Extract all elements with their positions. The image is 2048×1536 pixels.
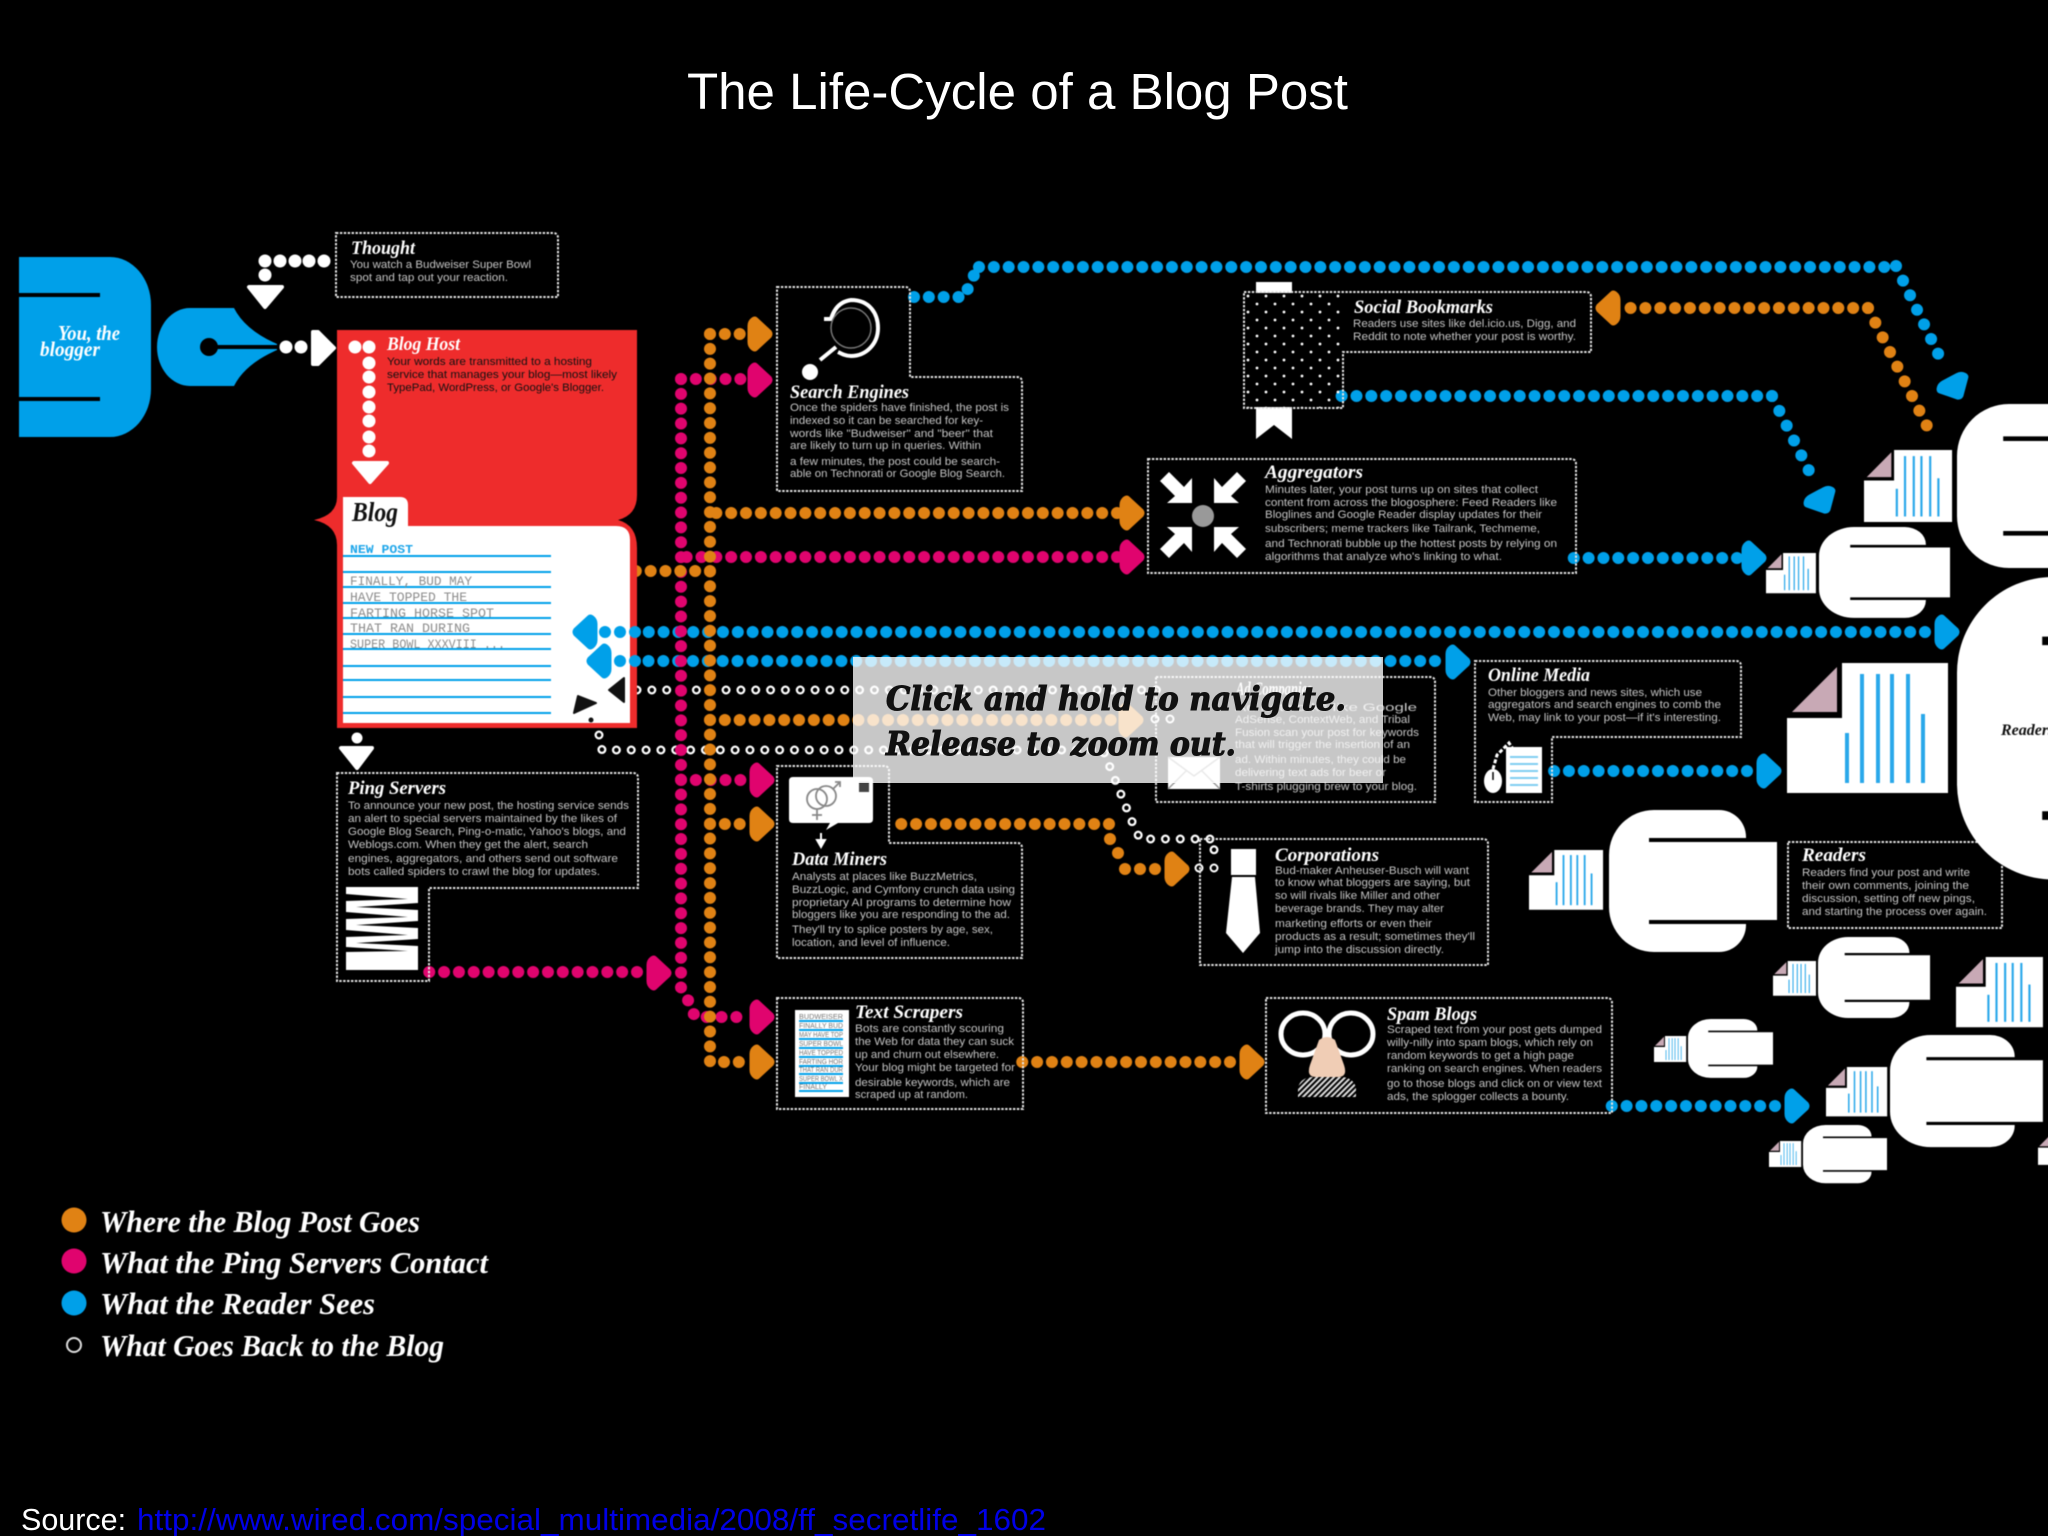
panel: ad companies: delivering text ads for beer or [1235, 767, 1386, 779]
panel: data miners: BuzzLogic, and Cymfony crunch data using [792, 884, 1015, 896]
panel: online media: Online Media [1488, 665, 1590, 686]
panel: ping servers: Ping Servers [347, 778, 446, 799]
panel: ad companies: AdSense, ContextWeb, and Tribal [1235, 714, 1410, 726]
panel: text scrapers: Text Scrapers [855, 1002, 963, 1023]
panel: corporations: Corporations [1275, 845, 1379, 866]
connector: what goes back to the blog (open dots) [599, 690, 1218, 872]
panel: data miners: bloggers like you are responding to the ad. [792, 909, 1010, 921]
legend: What the Ping Servers Contact [100, 1245, 489, 1280]
panel: data miners: proprietary AI programs to determine how [792, 897, 1011, 909]
panel: data miners: location, and level of influence. [792, 937, 950, 949]
panel: corporations [1200, 839, 1488, 965]
blog post text: THAT RAN DURING [350, 621, 470, 636]
panel: ping servers: To announce your new post, the hosting service sends [348, 800, 630, 812]
blog host text: Your words are transmitted to a hosting [387, 356, 592, 368]
panel: social bookmarks: Social Bookmarks [1354, 297, 1493, 318]
panel: text scrapers: Your blog might be targeted for [855, 1062, 1015, 1074]
icon: envelope [1168, 757, 1220, 789]
panel: corporations: to know what bloggers are saying, but [1275, 877, 1470, 889]
source link: http://www.wired.com/special_multimedia/2008/ff_secretlife_1602 [137, 1503, 1046, 1536]
icon: scraped page: SUPER BOWL X [799, 1076, 843, 1083]
panel: aggregators [1148, 459, 1576, 573]
panel: ad companies [1156, 677, 1435, 802]
icon: scraped page: MAY HAVE TOP [799, 1032, 843, 1039]
panel: aggregators: subscribers; meme trackers like Tailrank, Techmeme, [1265, 523, 1540, 535]
panel: spam blogs: Spam Blogs [1387, 1004, 1477, 1025]
panel: spam blogs: Scraped text from your post gets dumped [1387, 1024, 1602, 1036]
panel: data miners: Analysts at places like BuzzMetrics, [792, 871, 977, 883]
panel: spam blogs: go to those blogs and click on or view text [1387, 1078, 1602, 1090]
panel: aggregators: content from across the blogosphere: Feed Readers like [1265, 497, 1557, 509]
panel: ad companies: Ad Companies [1235, 679, 1312, 700]
panel: aggregators: Aggregators [1264, 462, 1363, 483]
legend: What the Reader Sees [100, 1286, 375, 1321]
panel: corporations: products as a result; sometimes they'll [1275, 931, 1475, 943]
panel: search engines: words like "Budweiser" and "beer" that [789, 428, 993, 440]
panel: data miners: They'll try to splice posters by age, sex, [792, 924, 993, 936]
panel: data miners: Data Miners [791, 849, 887, 870]
legend: Where the Blog Post Goes [100, 1204, 420, 1239]
panel: ping servers: Weblogs.com. When they get the alert, search [348, 839, 588, 851]
panel: ad companies: T-shirts plugging brew to your blog. [1235, 781, 1417, 793]
navigation overlay [853, 657, 1383, 783]
legend: What Goes Back to the Blog [100, 1328, 444, 1363]
flow diagram [19, 233, 2048, 1363]
panel: ping servers: Google Blog Search, Ping-o-matic, Yahoo's blogs, and [348, 826, 626, 838]
arrow: thought to pen [249, 254, 330, 307]
panel: ping servers: an alert to special servers maintained by the likes of [348, 813, 618, 825]
blog host text: TypePad, WordPress, or Google's Blogger. [387, 382, 604, 394]
panel: aggregators: algorithms that analyze who's linking to what. [1265, 551, 1502, 563]
blog post text: FINALLY, BUD MAY [350, 574, 472, 589]
panel: thought [336, 233, 558, 297]
panel: social bookmarks: Reddit to note whether your post is worthy. [1353, 331, 1576, 343]
panel: corporations: jump into the discussion directly. [1274, 944, 1444, 956]
icon: scraped page: BUDWEISER [799, 1014, 843, 1021]
icon: mouse and document [1484, 743, 1542, 793]
navigation overlay: Click and hold to navigate. [886, 679, 1346, 718]
blog host text [387, 356, 618, 394]
blog post text: HAVE TOPPED THE [350, 590, 467, 605]
icon: disguise glasses [1281, 1013, 1373, 1097]
panel: text scrapers: scraped up at random. [855, 1089, 968, 1101]
icon: scraped page: HAVE TOPPED [799, 1050, 843, 1057]
panel: ad companies: ad. Within minutes, they could be [1235, 754, 1406, 766]
panel: social bookmarks [1244, 282, 1591, 439]
icon: bookmark ribbon [1256, 282, 1292, 439]
panel: search engines: indexed so it can be searched for key- [790, 415, 983, 427]
icons: readers heads [1609, 404, 2048, 1183]
panel: readers: and starting the process over again. [1802, 906, 1987, 918]
icon: scraped page: THAT RAN DUR [799, 1067, 843, 1074]
connector: where the blog post goes (orange dots) [634, 291, 1934, 1079]
source line: Source: [21, 1503, 126, 1536]
icon: speech bubble with gender symbols [789, 777, 873, 847]
panel: ping servers [337, 773, 638, 981]
panel: spam blogs: willy-nilly into spam blogs, which rely on [1386, 1037, 1593, 1049]
panel: corporations: Bud-maker Anheuser-Busch will want [1275, 865, 1469, 877]
panel: thought: spot and tap out your reaction. [350, 272, 508, 284]
connector: what the ping servers contact (pink dots) [428, 363, 1144, 1034]
panel: aggregators: and Technorati bubble up the hottest posts by relying on [1265, 538, 1557, 550]
panel: online media: Other bloggers and news sites, which use [1488, 687, 1702, 699]
panel: text scrapers: up and churn out elsewhere. [855, 1049, 999, 1061]
panel: corporations: beverage brands. They may alter [1275, 903, 1444, 915]
panel: online media [1475, 661, 1741, 802]
title: The Life-Cycle of a Blog Post [687, 63, 1348, 120]
icon: magnifier [802, 300, 878, 380]
blog host heading: Blog Host [386, 334, 461, 355]
panel: corporations: so will rivals like Miller and other [1275, 890, 1440, 902]
panel: blog host and blog [314, 330, 637, 728]
panel: readers: discussion, setting off new pings, [1802, 893, 1975, 905]
panel: text scrapers: Bots are constantly scouring [855, 1023, 1004, 1035]
panel: corporations: marketing efforts or even their [1275, 918, 1432, 930]
panel: readers: their own comments, joining the [1802, 880, 1969, 892]
panel: search engines [777, 287, 1022, 491]
panel: text scrapers: desirable keywords, which are [855, 1077, 1010, 1089]
icon: you, the blogger: You, the [58, 321, 120, 345]
icon: scraped page: FINALLY [799, 1084, 827, 1091]
icon: necktie [1226, 849, 1260, 953]
panel: search engines: a few minutes, the post could be search- [790, 456, 1000, 468]
panel: ad companies: Ad networks like Google [1235, 702, 1417, 714]
icon: scraped page [795, 1010, 849, 1097]
blog post lines [343, 555, 551, 714]
icon: you, the blogger [19, 257, 151, 437]
new post label: NEW POST [350, 543, 413, 557]
panel: ad companies: that will trigger the insertion of an [1235, 739, 1410, 751]
panel: ad companies: Fusion scan your post for keywords [1235, 727, 1420, 739]
panel: online media: Web, may link to your post—if it's interesting. [1488, 712, 1721, 724]
panel: online media: aggregators and search engines to comb the [1488, 699, 1721, 711]
panel: spam blogs: ads, the splogger collects a bounty. [1387, 1091, 1569, 1103]
panel: thought: Thought [351, 238, 416, 259]
arrows: back to the blog [574, 678, 624, 722]
icons: posts held by readers [1529, 450, 2048, 1167]
blog post text: FARTING HORSE SPOT [350, 606, 494, 621]
blog host text: service that manages your blog—most likely [387, 369, 618, 381]
panel: search engines: Once the spiders have finished, the post is [790, 402, 1010, 414]
blog post text [350, 574, 505, 652]
connector: what the reader sees (blue dots) [605, 266, 1976, 1123]
panel: ping servers: engines, aggregators, and others send out software [348, 853, 618, 865]
arrow: pen to blog host [280, 332, 334, 364]
arrow: host to blog [348, 340, 387, 482]
panel: data miners [777, 766, 1022, 958]
navigation overlay: Release to zoom out. [885, 724, 1236, 763]
icon: scraped page: SUPER BOWL [799, 1041, 843, 1048]
panel: readers: Readers find your post and write [1802, 867, 1970, 879]
icon: scraped page: FARTING HOR [799, 1059, 843, 1066]
panel: spam blogs [1266, 998, 1612, 1113]
blog post text: SUPER BOWL XXXVIII ... [350, 637, 505, 652]
panel: search engines: able on Technorati or Google Blog Search. [790, 468, 1005, 480]
icon: pen nib [157, 308, 277, 386]
panel: text scrapers: the Web for data they can suck [855, 1036, 1015, 1048]
arrow: blog to ping servers [341, 732, 372, 768]
panel: readers [1788, 842, 2002, 928]
panel: thought: You watch a Budweiser Super Bowl [350, 259, 531, 271]
legend [62, 1204, 489, 1363]
panel: social bookmarks: Readers use sites like del.icio.us, Digg, and [1353, 318, 1576, 330]
icon: spring [346, 887, 418, 970]
panel: aggregators: Minutes later, your post turns up on sites that collect [1265, 484, 1538, 496]
icon: you, the blogger: blogger [40, 337, 101, 361]
panel: spam blogs: ranking on search engines. When readers [1387, 1063, 1603, 1075]
panel: search engines: Search Engines [790, 382, 909, 403]
icon: converging arrows [1160, 472, 1246, 558]
panel: spam blogs: random keywords to get a high page [1387, 1050, 1574, 1062]
panel: text scrapers [777, 998, 1023, 1109]
blue arrows and dots entering the blog [573, 615, 641, 678]
blog heading: Blog [351, 497, 398, 527]
panel: search engines: are likely to turn up in queries. Within [790, 440, 981, 452]
icon: scraped page: FINALLY BUD [799, 1023, 843, 1030]
panel: readers: Readers [1801, 845, 1866, 866]
panel: aggregators: Bloglines and Google Reader display updates for their [1265, 509, 1542, 521]
panel: ping servers: bots called spiders to crawl the blog for updates. [348, 866, 600, 878]
